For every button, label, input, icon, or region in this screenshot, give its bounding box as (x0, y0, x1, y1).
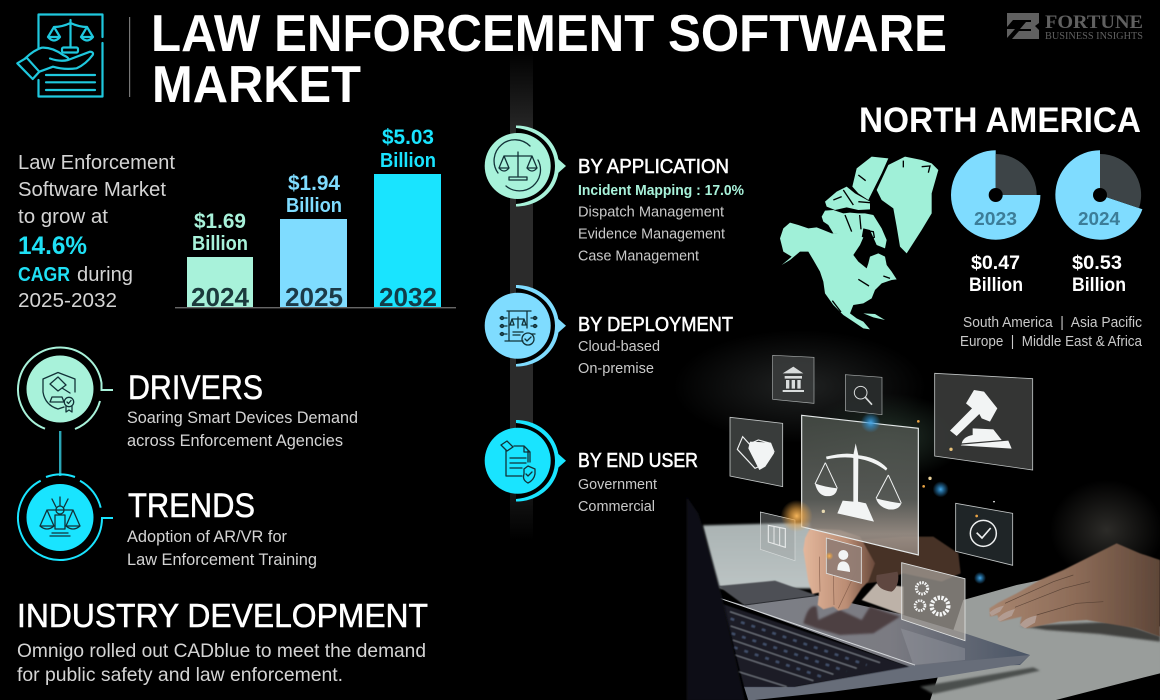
value: 2023 market size (969, 252, 1023, 296)
text: trends description: Law Enforcement Training (127, 551, 317, 569)
value: 2023 market size: $0.47 (971, 252, 1020, 274)
text: application list (578, 183, 744, 264)
text: industry development description (17, 640, 426, 686)
text: drivers description: Soaring Smart Devices Demand (127, 409, 358, 427)
bar 2024: Billion (192, 233, 248, 255)
text: other regions: Europe | Middle East & Africa (960, 334, 1143, 350)
gear reflection (901, 628, 965, 665)
bar 2032: $5.03 (382, 126, 434, 149)
heading: trends: TRENDS (128, 487, 255, 525)
panel: handshake (730, 417, 783, 487)
title: LAW ENFORCEMENT SOFTWARE (151, 5, 947, 63)
panel: by deployment (485, 285, 733, 377)
panel: trends (18, 474, 317, 569)
logo: Fortune Business Insights: FORTUNE (1045, 12, 1143, 33)
text: application list: Incident Mapping : 17.0% (578, 183, 744, 199)
panel: gears (902, 563, 965, 641)
heading: drivers: DRIVERS (128, 369, 263, 407)
panel: scales of justice (802, 415, 918, 555)
shadow under laptop (920, 667, 1040, 694)
icon: trends badge (18, 474, 113, 560)
text block: CAGR summary: Software Market (18, 179, 166, 201)
hand reflection on trackpad (803, 606, 900, 635)
value: 2023 market size: Billion (969, 274, 1023, 296)
text: drivers description (127, 409, 358, 450)
light sparks (781, 413, 995, 584)
text: application list: Evidence Management (578, 226, 725, 242)
panel: binders (760, 512, 795, 561)
heading: by application: BY APPLICATION (578, 156, 729, 178)
icon: deployment badge (485, 285, 566, 366)
bar 2032: Billion (380, 150, 436, 172)
icon: header law document (17, 14, 102, 96)
logo: Fortune Business Insights (1007, 12, 1143, 42)
laptop palm rest (720, 595, 1030, 668)
pie chart: 2024 (1055, 150, 1142, 240)
heading: north america: NORTH AMERICA (859, 101, 1141, 140)
heading: industry development: INDUSTRY DEVELOPMENT (17, 597, 428, 634)
laptop screen edge (687, 497, 745, 700)
photo: laptop and legal hologram icons (673, 330, 1160, 700)
heading: by end user: BY END USER (578, 450, 698, 472)
panel: by end user (485, 420, 698, 515)
pie chart: 2023 (951, 150, 1040, 240)
logo: Fortune Business Insights: BUSINESS INSIGHTS (1045, 31, 1143, 42)
text: deployment list (578, 339, 660, 377)
text: trends description: Adoption of AR/VR for (127, 528, 287, 546)
left hand (803, 528, 961, 611)
text block: CAGR summary: to grow at (18, 206, 108, 228)
desk right (930, 573, 1160, 700)
desk left (703, 523, 815, 588)
panel: drivers (18, 347, 358, 450)
icon: end user badge (485, 420, 566, 502)
laptop front frame (744, 655, 1030, 700)
bar 2024 (187, 210, 253, 312)
connector (59, 431, 61, 476)
value: 2024 market size (1072, 252, 1126, 296)
text block: CAGR summary: during (77, 264, 133, 286)
text block: CAGR summary: 2025-2032 (18, 290, 117, 312)
bar 2032: 2032 (379, 282, 437, 312)
bar 2024: $1.69 (194, 210, 246, 233)
bar 2025: Billion (286, 195, 342, 217)
header separator (129, 17, 130, 97)
text block: CAGR summary (18, 152, 175, 312)
text: deployment list: On-premise (578, 361, 654, 377)
panel: person (826, 538, 861, 583)
text: application list: Case Management (578, 248, 699, 264)
title: MARKET (152, 56, 361, 114)
shadow under right hand (1020, 622, 1160, 642)
text: application list: Dispatch Management (578, 204, 724, 220)
bar 2025: 2025 (285, 282, 343, 312)
panel: by application (485, 126, 744, 264)
text: industry development description: for public safety and law enforcement. (17, 664, 343, 686)
value: 2024 market size: Billion (1072, 274, 1126, 296)
heading: by deployment: BY DEPLOYMENT (578, 314, 733, 336)
text: trends description (127, 528, 317, 569)
vertical band (510, 50, 533, 540)
pie chart: 2023: 2023 (974, 208, 1017, 229)
panel: bank (773, 355, 814, 403)
text: end user list (578, 477, 657, 515)
bar 2024: 2024 (191, 282, 250, 312)
text: deployment list: Cloud-based (578, 339, 660, 355)
bar 2032 (374, 126, 441, 312)
right hand (989, 543, 1160, 637)
map: north america (780, 157, 938, 329)
trackpad line (745, 596, 817, 605)
keyboard (723, 604, 909, 687)
text: other regions: South America | Asia Pacific (963, 315, 1142, 331)
text: other regions (960, 315, 1143, 350)
pie chart: 2024: 2024 (1078, 208, 1121, 229)
text: end user list: Commercial (578, 499, 655, 515)
text: industry development description: Omnigo rolled out CADblue to meet the demand (17, 640, 426, 662)
icon: drivers badge (18, 347, 113, 429)
panel: gavel (935, 373, 1033, 470)
title (151, 5, 947, 114)
bar 2025 (280, 172, 347, 312)
photo backdrop glow (673, 330, 1160, 580)
value: 2024 market size: $0.53 (1072, 252, 1122, 274)
panel: check mark (956, 503, 1013, 565)
light area behind fingers (862, 583, 903, 615)
bar 2025: $1.94 (288, 172, 340, 195)
bar chart (175, 126, 456, 312)
text block: CAGR summary: CAGR (18, 264, 70, 286)
laptop lid back (718, 581, 817, 606)
text: end user list: Government (578, 477, 657, 493)
panel: magnifier (845, 375, 882, 415)
icon: application badge (485, 126, 566, 206)
text block: CAGR summary: 14.6% (18, 232, 87, 260)
text block: CAGR summary: Law Enforcement (18, 152, 175, 174)
text: drivers description: across Enforcement Agencies (127, 432, 343, 450)
laptop edge highlight (720, 598, 915, 665)
